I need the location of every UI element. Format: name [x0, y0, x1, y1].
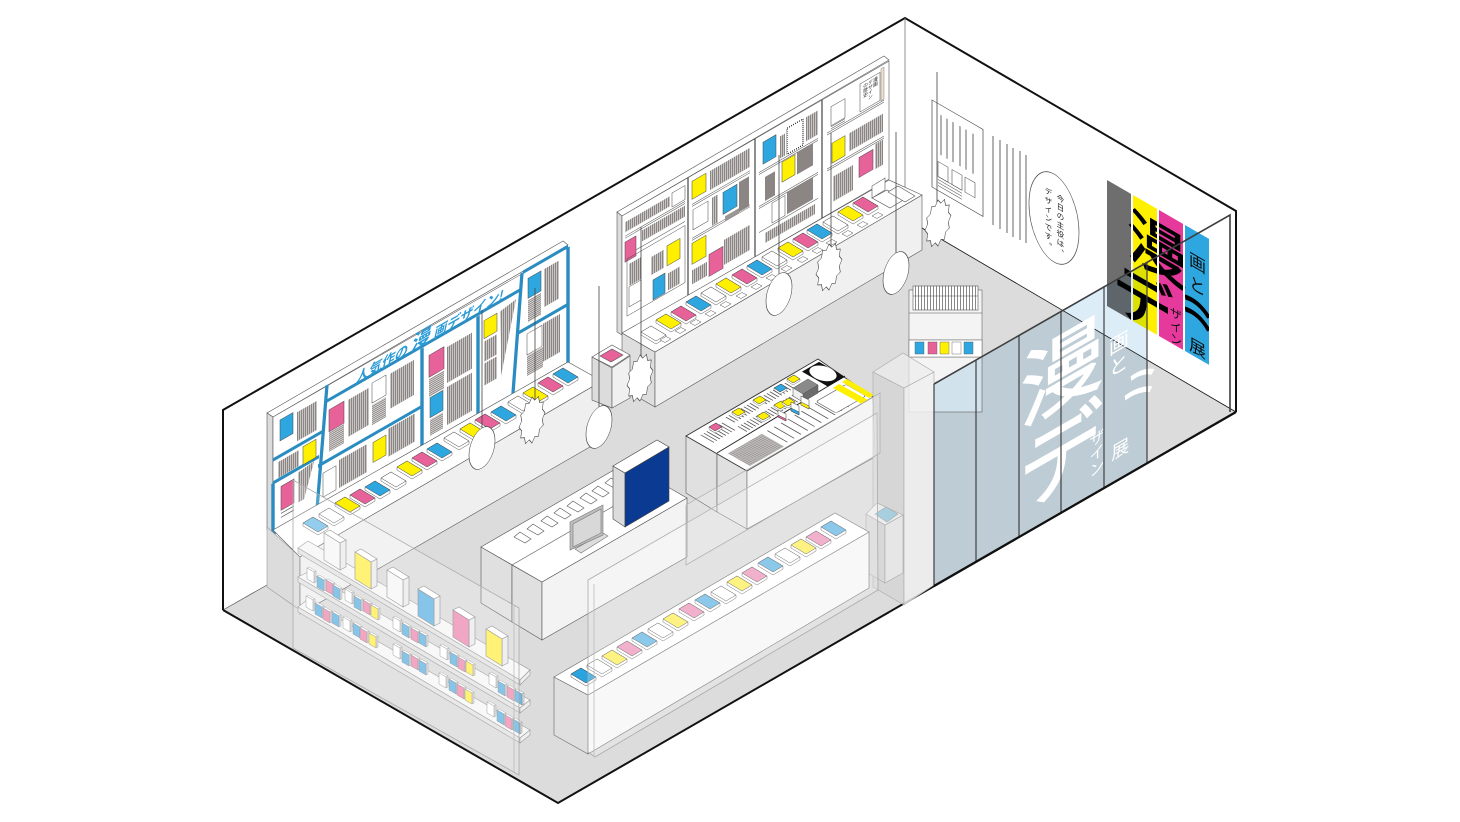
standing cards [778, 396, 809, 421]
back counter [622, 180, 922, 407]
bubble text: 今日の主役は、 [1056, 191, 1064, 259]
oval sign [586, 400, 612, 454]
blue frame lines [273, 246, 568, 535]
frontal shelf display [909, 286, 982, 412]
books on left counter [303, 368, 578, 535]
center island with comic table [686, 359, 875, 529]
burst sign [816, 237, 842, 297]
glass lettering: ザイン [1087, 426, 1103, 481]
tall translucent column [873, 353, 934, 605]
banner text: 人気作の 漫 画デザイン! [354, 279, 507, 389]
counter end stand [872, 178, 915, 208]
right wall exhibit: info panel [932, 100, 983, 216]
left counter [267, 362, 602, 614]
books on back counter [641, 197, 883, 344]
floor [223, 218, 1236, 803]
small books on shelf 3 [306, 595, 522, 734]
left shelves [298, 541, 530, 743]
burst sign [925, 193, 951, 253]
poster lettering: デ [1113, 251, 1173, 353]
shelf 1 [298, 541, 530, 685]
panel text blocks [625, 71, 883, 324]
small pedestal [866, 503, 903, 583]
glass lettering: 画と [1106, 326, 1130, 384]
book and text blocks [280, 269, 542, 522]
poster lettering: 漫 [1127, 199, 1187, 301]
glass frame lines [934, 215, 1236, 586]
gray box [793, 379, 818, 402]
burst sign [627, 348, 653, 408]
small tiles [514, 478, 622, 543]
yellow stripes [833, 384, 868, 404]
back display panel [617, 56, 889, 335]
glass partition: middle [686, 393, 880, 565]
storefront glass [934, 215, 1236, 586]
exhibition caption: デザイン [867, 77, 873, 101]
large books on top shelf [324, 530, 508, 666]
poster on right wall [1107, 180, 1209, 374]
oval sign [469, 421, 495, 475]
burst sign [519, 390, 545, 450]
table top contents [694, 362, 875, 466]
poster on right wall: ザイン [1168, 303, 1182, 350]
exhibition caption: 漫画 [872, 74, 878, 90]
speech bubble [1029, 160, 1079, 276]
right wall text lines [993, 136, 1026, 243]
glass lettering: 漫 [1020, 303, 1104, 445]
books on front counter [571, 521, 846, 686]
glass lettering: 展 [1108, 435, 1129, 465]
exhibition caption [860, 67, 884, 113]
glass lettering: デ [1019, 388, 1103, 530]
small books on table [709, 375, 800, 433]
island counter with blue box [481, 440, 687, 640]
room outline [223, 18, 1236, 803]
blue box [613, 440, 669, 527]
shelf 2 [298, 572, 530, 713]
panel books [625, 76, 873, 325]
front long counter [554, 513, 869, 754]
glass lettering [1019, 275, 1153, 530]
left display panel (blue frame) [267, 241, 568, 535]
poster on right wall: 展 [1187, 333, 1207, 362]
monitor [570, 505, 608, 553]
glass partition: left [293, 480, 519, 775]
hanging signs [469, 72, 951, 475]
oval sign [883, 246, 909, 300]
speech bubble: デザインです。 [1044, 184, 1052, 252]
poster small title: 画と [1187, 248, 1207, 306]
pedestal with pink book [592, 345, 630, 408]
poster lettering [1117, 208, 1209, 332]
exhibition caption: の歴史 [862, 81, 868, 100]
oval sign [766, 267, 792, 321]
glass partition: front [588, 413, 878, 757]
small books on shelf 2 [307, 567, 524, 705]
shelf 3 [298, 600, 530, 743]
